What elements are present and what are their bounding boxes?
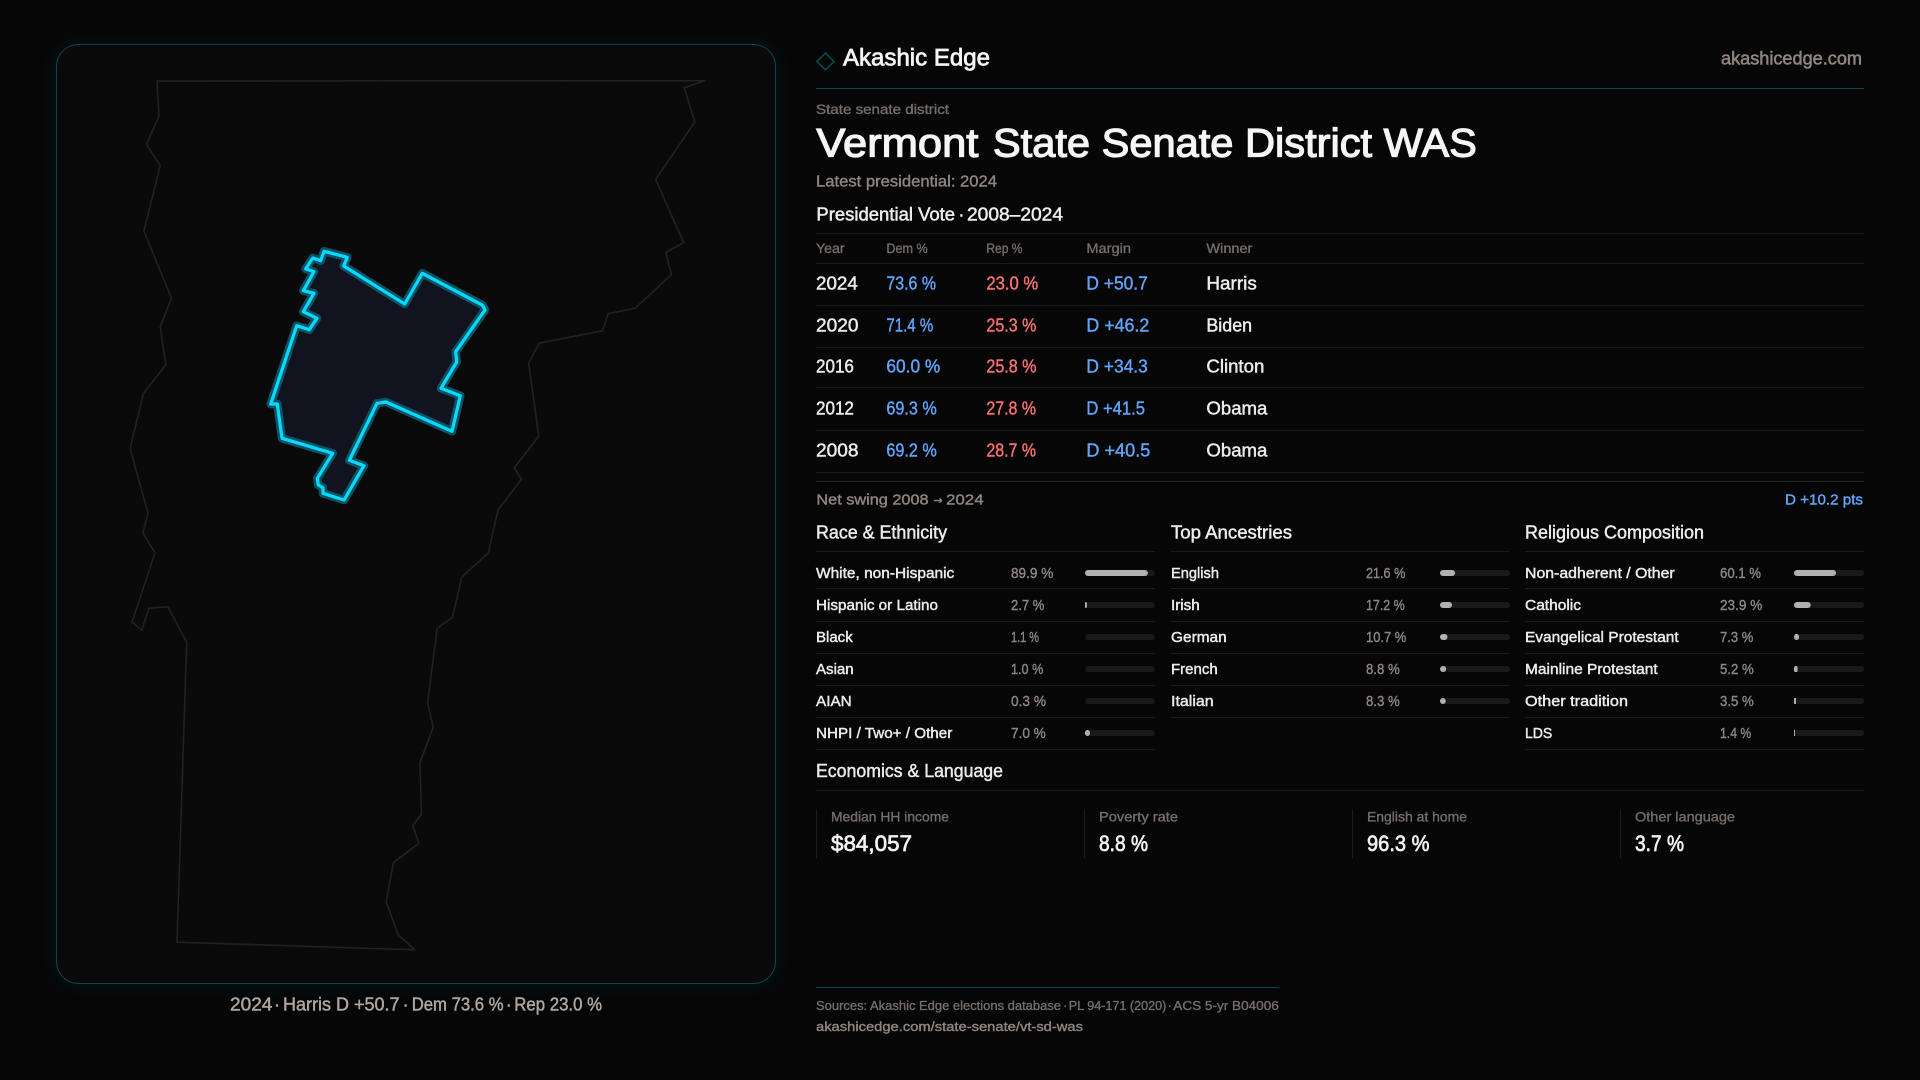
panel: religious composition: Other tradition [1525, 693, 1628, 710]
table header: Margin [1086, 240, 1131, 256]
map: Vermont state outline [130, 81, 705, 950]
map caption: · [274, 994, 280, 1014]
row 2012: 2012 [816, 398, 854, 418]
bars: race and ethnicity [1085, 570, 1155, 736]
panel: economics and language: Economics & Language [816, 761, 1003, 781]
row 2024: 23.0 % [986, 274, 1038, 294]
footer sources: · [1168, 998, 1172, 1013]
stat: poverty rate [1084, 808, 1178, 858]
map caption: Rep 23.0 % [514, 994, 602, 1014]
panel: race and ethnicity: White, non-Hispanic [816, 565, 955, 582]
panel: race and ethnicity: 7.0 % [1011, 725, 1046, 742]
panel: religious composition: 5.2 % [1720, 661, 1754, 678]
panel: race and ethnicity: 2.7 % [1011, 597, 1044, 614]
panel: map [56, 44, 776, 984]
panel: top ancestries [1171, 522, 1510, 718]
stat: median income: $84,057 [831, 831, 912, 856]
panel: top ancestries: 17.2 % [1366, 597, 1405, 614]
row 2008: D +40.5 [1086, 440, 1150, 460]
panel: race and ethnicity: NHPI / Two+ / Other [816, 725, 952, 742]
site url: akashicedge.com [1721, 48, 1862, 68]
map: highlighted district [271, 251, 485, 500]
row 2008: 28.7 % [986, 440, 1036, 460]
panel: religious composition: 23.9 % [1720, 597, 1762, 614]
icon: brand diamond [817, 53, 834, 70]
panel: top ancestries: 8.8 % [1366, 661, 1400, 678]
stat: median income: Median HH income [831, 808, 949, 824]
panel: economics and language [816, 761, 1864, 858]
row 2008 [816, 440, 1268, 460]
panel: religious composition: Non-adherent / Other [1525, 565, 1675, 582]
table header: Dem % [886, 240, 928, 256]
map caption [230, 994, 602, 1014]
net swing: 2024 [946, 492, 984, 508]
panel: race and ethnicity: 89.9 % [1011, 565, 1053, 582]
panel: race and ethnicity: Asian [816, 661, 854, 678]
panel: religious composition [1525, 522, 1864, 750]
panel: religious composition: LDS [1525, 725, 1552, 742]
stat: english at home: 96.3 % [1367, 831, 1430, 856]
row 2008: Obama [1206, 440, 1268, 460]
title: Vermont [816, 122, 978, 166]
bars: top ancestries [1440, 570, 1510, 704]
panel: race and ethnicity: AIAN [816, 693, 852, 710]
row 2020 [816, 316, 1252, 336]
panel: race and ethnicity: Black [816, 629, 853, 646]
row 2012: Obama [1206, 398, 1268, 418]
panel: religious composition: Catholic [1525, 597, 1582, 614]
panel: religious composition: 60.1 % [1720, 565, 1761, 582]
map caption: Harris D +50.7 [283, 994, 400, 1014]
panel: top ancestries: 21.6 % [1366, 565, 1405, 582]
footer sources [816, 988, 1279, 1034]
panel: religious composition: Religious Composition [1525, 522, 1704, 542]
panel: top ancestries: English [1171, 565, 1219, 582]
bars: religious composition [1794, 570, 1864, 736]
row 2024: 2024 [816, 274, 858, 294]
table header [816, 240, 1253, 256]
row 2020: D +46.2 [1086, 316, 1149, 336]
panel: top ancestries: French [1171, 661, 1218, 678]
table header: Year [816, 240, 845, 256]
panel: race and ethnicity [816, 522, 1155, 750]
heading: presidential vote: · [958, 204, 964, 224]
panel: top ancestries: Irish [1171, 597, 1200, 614]
panel: race and ethnicity: 0.3 % [1011, 693, 1046, 710]
brand name: Akashic Edge [843, 44, 990, 72]
row 2020: 2020 [816, 316, 858, 336]
row 2016: Clinton [1206, 356, 1264, 376]
table header: Winner [1206, 240, 1253, 256]
row 2012: D +41.5 [1086, 398, 1145, 418]
net swing [816, 482, 1864, 508]
row 2016: 2016 [816, 356, 854, 376]
stat: other language: Other language [1635, 808, 1735, 824]
section: presidential vote [816, 204, 1864, 472]
footer sources: ACS 5-yr B04006 [1173, 998, 1279, 1013]
row 2020: Biden [1206, 316, 1252, 336]
heading: presidential vote [816, 204, 1063, 224]
stat: other language: 3.7 % [1635, 831, 1684, 856]
row 2008: 2008 [816, 440, 858, 460]
row 2024 [816, 274, 1257, 294]
panel: race and ethnicity: 1.0 % [1011, 661, 1043, 678]
net swing: D +10.2 pts [1785, 492, 1863, 508]
panel: religious composition: 7.3 % [1720, 629, 1753, 646]
subtitle: Latest presidential: 2024 [816, 174, 997, 190]
table header: Rep % [986, 240, 1022, 256]
panel: top ancestries: Top Ancestries [1171, 522, 1292, 542]
stat: poverty rate: Poverty rate [1099, 808, 1178, 824]
panel: top ancestries: 8.3 % [1366, 693, 1400, 710]
panel: race and ethnicity: Race & Ethnicity [816, 522, 947, 542]
row 2016: 25.8 % [986, 356, 1036, 376]
map caption: Dem 73.6 % [412, 994, 504, 1014]
eyebrow: State senate district [816, 101, 949, 117]
panel: religious composition: 1.4 % [1720, 725, 1751, 742]
map caption: 2024 [230, 994, 272, 1014]
row 2020: 71.4 % [886, 316, 933, 336]
panel: race and ethnicity: 1.1 % [1011, 629, 1039, 646]
title: State Senate District WAS [993, 122, 1477, 166]
panel: religious composition: Mainline Protestant [1525, 661, 1659, 678]
row 2016 [816, 356, 1264, 376]
row 2016: D +34.3 [1086, 356, 1148, 376]
stat: english at home [1352, 808, 1467, 858]
footer sources: akashicedge.com/state-senate/vt-sd-was [816, 1019, 1084, 1034]
stat: english at home: English at home [1367, 808, 1467, 824]
row 2012: 27.8 % [986, 398, 1036, 418]
row 2024: 73.6 % [886, 274, 936, 294]
row 2008: 69.2 % [886, 440, 937, 460]
stat: median income [816, 808, 949, 858]
panel: religious composition: 3.5 % [1720, 693, 1754, 710]
panel: top ancestries: Italian [1171, 693, 1214, 710]
row 2016: 60.0 % [886, 356, 940, 376]
stat: poverty rate: 8.8 % [1099, 831, 1148, 856]
row 2012 [816, 398, 1268, 418]
stat: other language [1620, 808, 1735, 858]
row 2024: Harris [1206, 274, 1257, 294]
net swing: Net swing 2008 [816, 492, 929, 508]
heading: presidential vote: 2008–2024 [967, 204, 1063, 224]
map caption: · [403, 994, 409, 1014]
heading: presidential vote: Presidential Vote [816, 204, 955, 224]
panel: religious composition: Evangelical Protestant [1525, 629, 1680, 646]
row 2020: 25.3 % [986, 316, 1036, 336]
row 2012: 69.3 % [886, 398, 937, 418]
panel: top ancestries: German [1171, 629, 1227, 646]
header [816, 44, 1864, 88]
footer sources: Sources: Akashic Edge elections database [816, 998, 1061, 1013]
row 2024: D +50.7 [1086, 274, 1148, 294]
footer sources: PL 94-171 (2020) [1069, 998, 1166, 1013]
net swing: → [934, 494, 943, 507]
panel: top ancestries: 10.7 % [1366, 629, 1406, 646]
map caption: · [506, 994, 512, 1014]
footer sources: · [1063, 998, 1067, 1013]
panel: race and ethnicity: Hispanic or Latino [816, 597, 938, 614]
